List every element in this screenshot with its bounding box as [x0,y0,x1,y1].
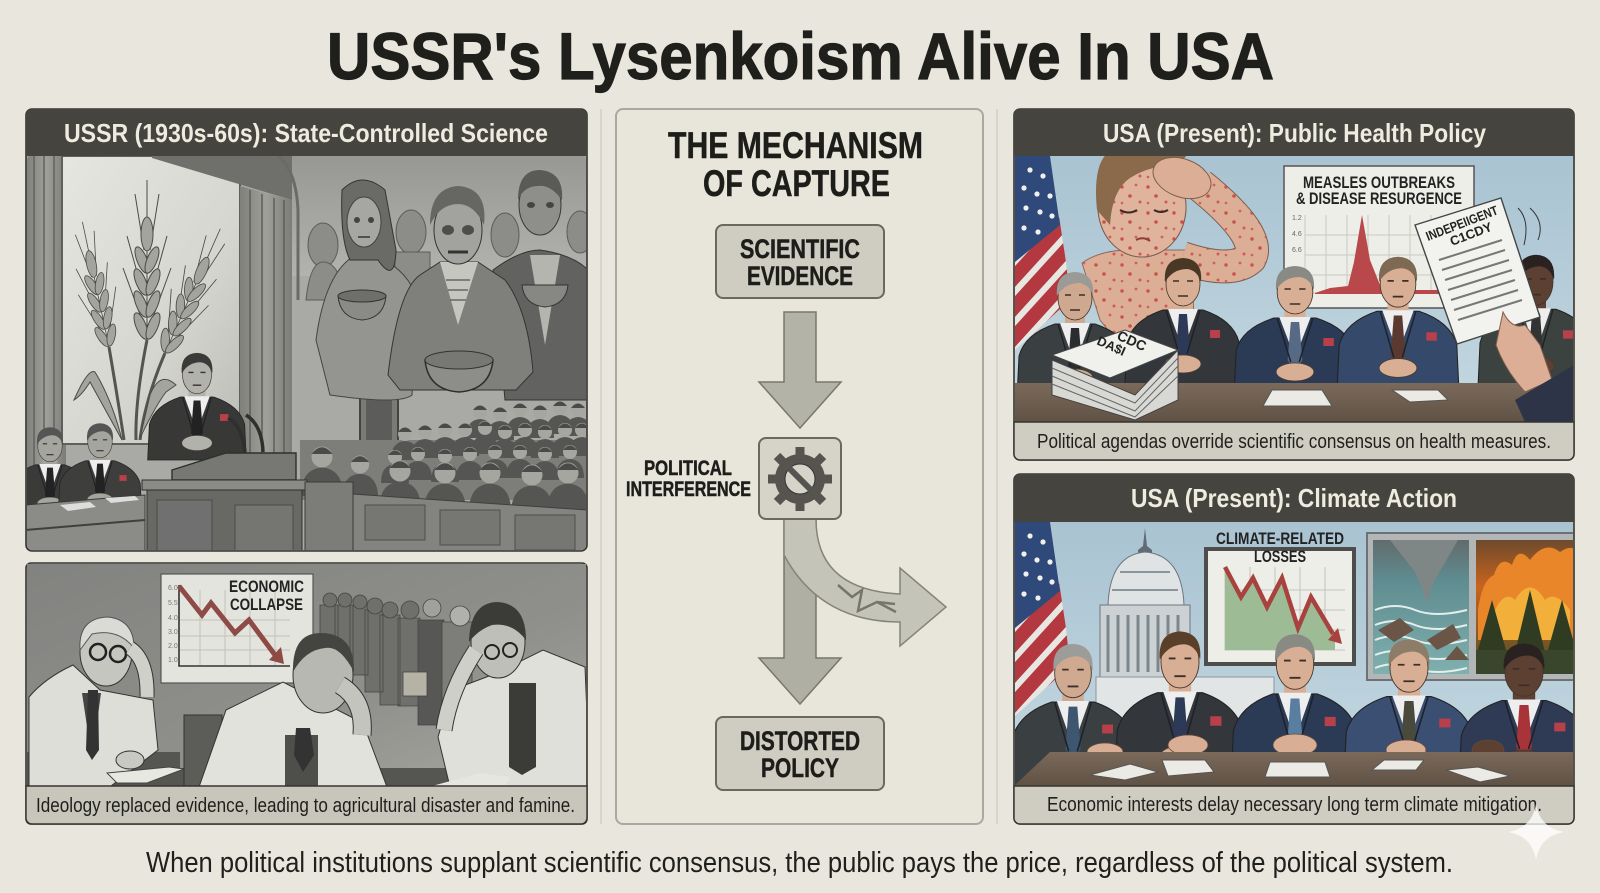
CDC data paper stack [1052,327,1178,420]
heading: mechanism [668,125,923,204]
measles chart: 4.6 [1292,231,1302,238]
economic collapse chart: 1.0 [168,657,178,664]
table [1015,383,1536,422]
heading: USSR: USSR (1930s-60s): State-Controlled Science [64,118,548,148]
box: distorted policy [716,717,884,790]
famine figure: right man [493,170,590,400]
economic collapse chart: 5.5 [168,600,178,607]
speaker [148,353,246,460]
left table [26,495,145,551]
box: scientific evidence: SCIENTIFIC [740,234,860,264]
title: USSR's Lysenkoism Alive In USA [327,19,1274,93]
panel: the mechanism of capture [616,109,983,824]
table papers [1090,760,1510,782]
left scientist [29,617,184,786]
famine figure: woman [316,180,418,400]
wildfire picture [1476,540,1576,674]
independent study paper: INDEPEIIGENT [1424,203,1500,244]
measles chart: MEASLES OUTBREAKS [1303,173,1455,192]
capitol building [1096,528,1274,752]
heading: climate action [1014,474,1574,522]
economic collapse chart [161,574,313,683]
footer statement: When political institutions supplant scientific consensus, the public pays the price, regardless of the political system. [146,847,1453,879]
microphones [228,415,263,452]
wooden chair [184,715,222,787]
arrow: down to distorted policy [759,519,841,704]
panel of officials [1017,254,1573,383]
illustration: capitol, charts and officials [1010,522,1589,786]
economic collapse chart: ECONOMIC [229,577,304,596]
illustration: scientists in despair [26,563,590,787]
wall door [359,399,399,440]
middle scientist [199,633,387,787]
stage curtain left [26,156,66,486]
audience bench [352,494,587,551]
heading: public health [1014,109,1574,156]
icon: blocked gear [768,447,832,511]
illustration: Soviet assembly with famine victims [8,156,596,551]
economic collapse chart: 2.0 [168,643,178,650]
american flag [1015,156,1068,350]
box: distorted policy: POLICY [761,753,839,783]
independent study paper: C1CDY [1448,219,1495,249]
measles chart: 6.6 [1292,247,1302,254]
window frame [1367,533,1577,680]
clasped hands [1087,734,1504,761]
measles chart: & DISEASE RESURGENCE [1296,189,1462,208]
measles chart: 1.2 [1292,215,1302,222]
background famine faces [306,210,593,300]
heading: USSR [26,109,587,156]
illustration: measles and officials [1010,150,1594,423]
climate-related losses chart: CLIMATE-RELATED [1216,529,1344,548]
box: distorted policy: DISTORTED [740,726,860,756]
CDC data paper stack: DA$I [1095,333,1128,359]
hand and sleeve holding study [1496,312,1574,422]
panel of officials [1010,631,1589,785]
seated officials left [27,423,142,504]
label: political interference: INTERFERENCE [626,478,751,501]
audience [300,401,596,514]
box: gear interference [759,438,841,519]
desk [27,752,448,786]
panel: USA public health policy [1010,109,1594,460]
sick child with measles [1082,150,1252,345]
bread line queue [320,593,472,725]
independent study paper [1415,198,1540,344]
table [1014,752,1574,786]
panel: USSR state-controlled science [8,109,596,551]
caption [1014,786,1574,824]
heading: climate action: USA (Present): Climate Action [1131,483,1457,513]
heading: public health: USA (Present): Public Health Policy [1103,118,1486,148]
watermark star [1508,804,1564,860]
panel: economic collapse [26,563,590,824]
famine figure: center starving man [388,186,533,392]
caption: Ideology replaced evidence, leading to agricultural disaster and famine. [36,795,575,817]
economic collapse chart: COLLAPSE [230,595,303,614]
stage curtain right [152,156,298,470]
box: scientific evidence [716,225,884,298]
measles chart [1284,166,1474,308]
economic collapse chart: 4.0 [168,615,178,622]
economic collapse chart: 6.0 [168,585,178,592]
right scientist [432,602,590,787]
economic collapse chart: 3.0 [168,629,178,636]
poster with wheat [62,156,240,444]
CDC data paper stack: CDC [1115,327,1149,354]
climate-related losses chart: LOSSES [1254,547,1306,566]
arrow: diverted branch with crack [784,519,946,646]
heading: mechanism: OF CAPTURE [703,163,890,204]
label: political interference: POLITICAL [644,457,732,480]
box: scientific evidence: EVIDENCE [747,261,853,291]
label: political interference [626,457,751,501]
caption [1014,422,1574,460]
heading: mechanism: THE MECHANISM [668,125,923,166]
american flag [1015,522,1068,716]
arrow: evidence to interference [759,312,841,428]
panel: USA climate action [1010,474,1589,824]
climate-related losses chart [1206,529,1354,664]
flood and tornado picture [1373,540,1469,674]
caption [26,786,587,824]
podium [142,453,353,551]
table papers [1263,390,1448,406]
